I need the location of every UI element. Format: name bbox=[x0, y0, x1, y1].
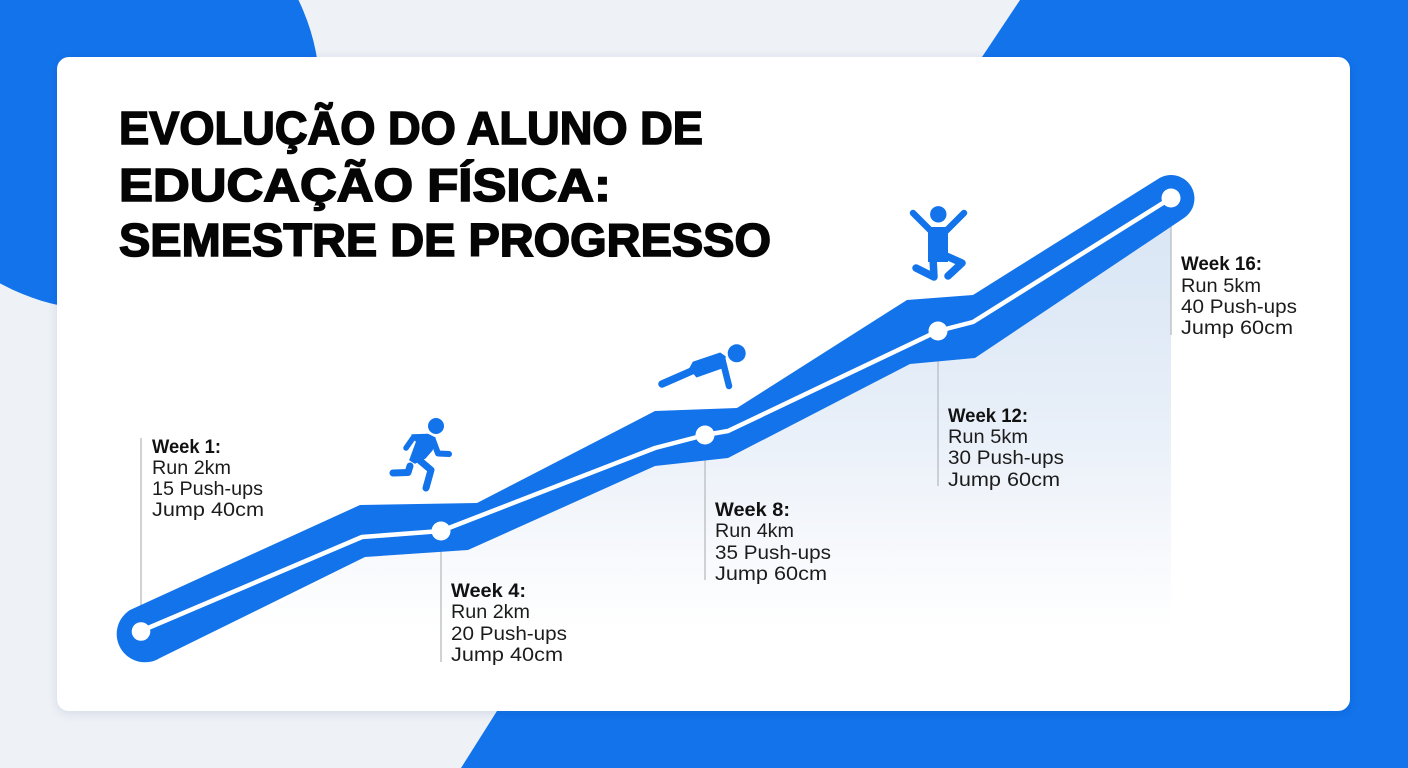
label: week 8: Week 8: bbox=[715, 500, 790, 521]
label: week 16 bbox=[1181, 254, 1297, 339]
area under progress line bbox=[230, 225, 1171, 640]
label: week 1 bbox=[152, 437, 264, 521]
label: week 4: Week 4: bbox=[451, 581, 526, 602]
title: EDUCAÇÃO FÍSICA: bbox=[119, 159, 611, 211]
label: week 4: Jump 40cm bbox=[451, 645, 563, 666]
label: week 8: Run 4km bbox=[715, 521, 794, 542]
label: week 12: 30 Push-ups bbox=[948, 448, 1064, 469]
connector lines bbox=[141, 210, 1171, 662]
label: week 16: 40 Push-ups bbox=[1181, 297, 1297, 318]
milestone dots bbox=[132, 188, 1181, 641]
title bbox=[119, 102, 771, 266]
label: week 8: 35 Push-ups bbox=[715, 543, 831, 564]
icon: runner bbox=[393, 418, 449, 488]
label: week 8: Jump 60cm bbox=[715, 564, 827, 585]
icon: push-up bbox=[662, 344, 746, 386]
title: EVOLUÇÃO DO ALUNO DE bbox=[119, 102, 703, 154]
label: week 12: Run 5km bbox=[948, 427, 1028, 448]
title: SEMESTRE DE PROGRESSO bbox=[119, 214, 771, 266]
label: week 1: 15 Push-ups bbox=[152, 479, 263, 500]
label: week 4: 20 Push-ups bbox=[451, 624, 567, 645]
label: week 4: Run 2km bbox=[451, 602, 530, 623]
progress band bbox=[117, 175, 1194, 662]
label: week 16: Jump 60cm bbox=[1181, 318, 1293, 339]
label: week 16: Week 16: bbox=[1181, 254, 1262, 275]
label: week 12: Jump 60cm bbox=[948, 470, 1060, 491]
progress line bbox=[141, 198, 1171, 631]
label: week 16: Run 5km bbox=[1181, 276, 1261, 297]
panel: main card bbox=[57, 57, 1350, 711]
icon: jumper bbox=[913, 206, 964, 277]
label: week 1: Jump 40cm bbox=[152, 500, 264, 521]
label: week 4 bbox=[451, 581, 567, 666]
label: week 1: Run 2km bbox=[152, 458, 231, 479]
label: week 8 bbox=[715, 500, 831, 585]
label: week 12 bbox=[948, 406, 1064, 491]
label: week 12: Week 12: bbox=[948, 406, 1028, 427]
label: week 1: Week 1: bbox=[152, 437, 221, 458]
